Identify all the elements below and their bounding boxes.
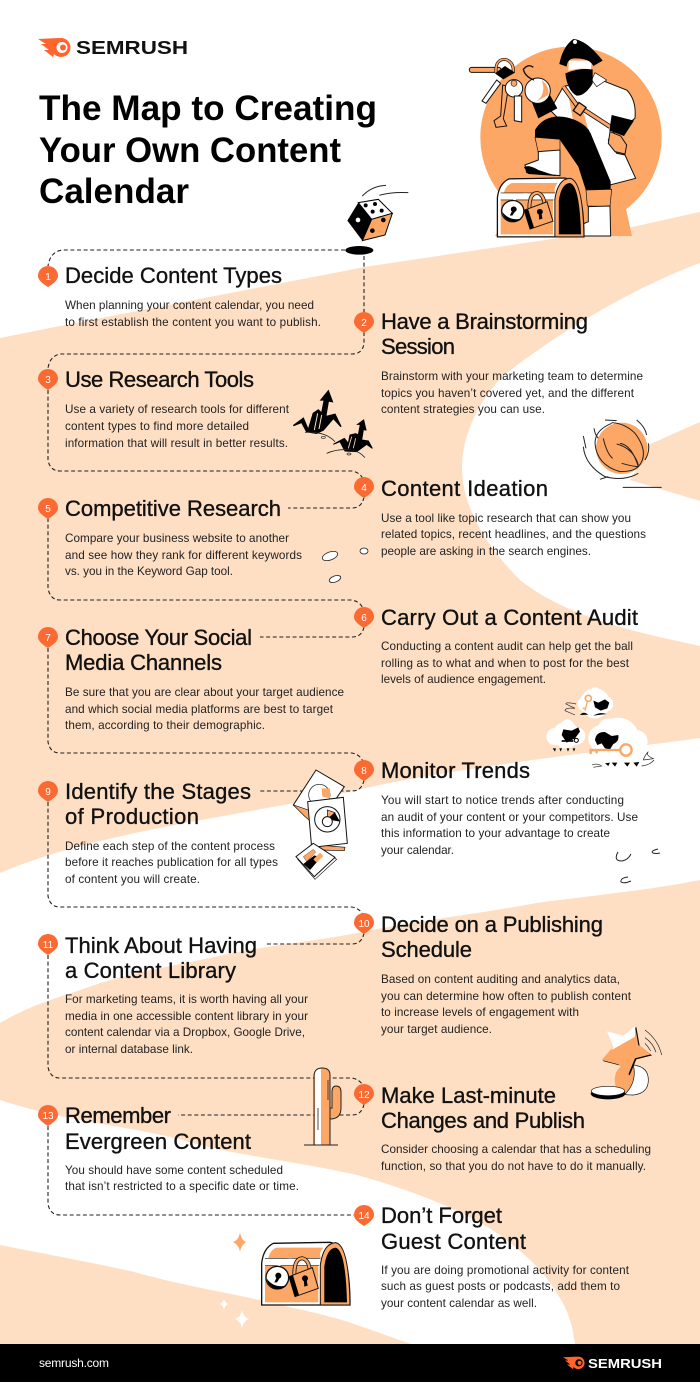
background: right peach wedge	[630, 422, 700, 501]
pin 10: 10	[358, 919, 370, 930]
step 5: vs. you in the Keyword Gap tool.	[65, 565, 233, 578]
pin 9: 9	[45, 787, 51, 798]
step 9: Identify the Stages	[65, 779, 251, 804]
step 6: rolling as to what and when to post for the best	[381, 657, 630, 670]
pin 14	[354, 1205, 374, 1226]
footer bar: semrush.com	[39, 1356, 109, 1370]
pin 3	[38, 369, 58, 390]
front document	[318, 845, 345, 851]
step 13: that isn’t restricted to a specific date or time.	[65, 1180, 299, 1193]
step 7: them, according to their demographic.	[65, 719, 265, 732]
pin 11	[38, 934, 58, 955]
step 6: Carry Out a Content Audit	[381, 605, 638, 630]
step 11: media in one accessible content library in your	[65, 1010, 308, 1023]
pin 6	[354, 607, 374, 628]
step 11: or internal database link.	[65, 1043, 193, 1056]
decoration: pebbles	[321, 548, 368, 584]
illustration: sheep with keys	[546, 687, 654, 767]
hand with keys	[532, 95, 557, 118]
step 10: Decide on a Publishing	[381, 912, 603, 937]
step 2: Brainstorm with your marketing team to determine	[381, 370, 643, 383]
title: Calendar	[39, 172, 189, 211]
illustration: star and coins	[591, 1026, 662, 1099]
shorts and lower leg	[535, 137, 560, 153]
pin 7	[38, 627, 58, 648]
keys	[469, 67, 501, 72]
pin 12	[354, 1084, 374, 1105]
pin 7: 7	[45, 633, 51, 644]
step 12	[354, 1083, 651, 1173]
pin 10	[354, 913, 374, 934]
step 4: related topics, recent headlines, and the questions	[381, 528, 646, 541]
left sheep	[546, 719, 585, 748]
step 1: to first establish the content you want to publish.	[65, 316, 321, 329]
logo: Semrush header	[38, 38, 188, 58]
step 1: When planning your content calendar, you need	[65, 299, 314, 312]
step 7: Choose Your Social	[65, 625, 252, 650]
step 13	[38, 1103, 299, 1193]
footer bar	[0, 1344, 700, 1382]
step 5: Compare your business website to another	[65, 532, 289, 545]
step 13: Remember	[65, 1103, 171, 1128]
step 7: Be sure that you are clear about your target audience	[65, 686, 344, 699]
step 6	[354, 605, 638, 686]
step 10: your target audience.	[381, 1023, 492, 1036]
step 2	[354, 309, 643, 416]
step 3: Use Research Tools	[65, 367, 254, 392]
step 3	[38, 367, 290, 450]
step 5: and see how they rank for different keywords	[65, 549, 302, 562]
step 4: Use a tool like topic research that can show you	[381, 512, 631, 525]
step 7	[38, 625, 344, 732]
step 3: information that will result in better results.	[65, 437, 288, 450]
step 4: Content Ideation	[381, 476, 548, 501]
step 8: You will start to notice trends after conducting	[381, 794, 624, 807]
step 10	[354, 912, 632, 1036]
step 9: of content you will create.	[65, 873, 200, 886]
logo: Semrush footer: SEMRUSH	[588, 1356, 662, 1371]
step 9: of Production	[65, 804, 199, 829]
logo: Semrush header: SEMRUSH	[76, 38, 188, 58]
step 9: Define each step of the content process	[65, 840, 275, 853]
title: Your Own Content	[39, 131, 341, 170]
icon: large white sparkle	[235, 1310, 249, 1329]
step 8: your calendar.	[381, 844, 454, 857]
step 11: Think About Having	[65, 933, 257, 958]
step 14	[354, 1203, 630, 1310]
step 11	[38, 933, 308, 1056]
pin 14: 14	[358, 1211, 370, 1222]
step 8	[354, 758, 638, 857]
illustration: pirate with keys on treasure chest	[469, 39, 662, 237]
background: bottom peach corner	[0, 1245, 411, 1344]
step 13: Evergreen Content	[65, 1129, 251, 1154]
step 12: Changes and Publish	[381, 1108, 585, 1133]
step 3: content types to find more detailed	[65, 420, 249, 433]
step 6: Conducting a content audit can help get the ball	[381, 640, 633, 653]
icon: small white sparkle	[220, 1299, 228, 1310]
step 14: your content calendar as well.	[381, 1297, 537, 1310]
treasure chest	[497, 178, 584, 237]
step 14: Don’t Forget	[381, 1203, 502, 1228]
step 14: such as guest posts or podcasts, add them to	[381, 1280, 620, 1293]
pin 9	[38, 781, 58, 802]
step 7: and which social media platforms are best to target	[65, 703, 334, 716]
step 10: Based on content auditing and analytics data,	[381, 973, 620, 986]
route: dashed path connecting steps	[48, 250, 364, 1215]
step 5: Competitive Research	[65, 496, 281, 521]
pin 11: 11	[43, 940, 54, 951]
armband	[609, 115, 634, 136]
illustration: bottom treasure chest	[262, 1242, 350, 1305]
step 14: Guest Content	[381, 1229, 526, 1254]
pin 2	[354, 312, 374, 333]
pin 6: 6	[361, 613, 367, 624]
step 10: Schedule	[381, 937, 472, 962]
step 8: Monitor Trends	[381, 758, 530, 783]
torso gap	[568, 95, 588, 130]
pin 8: 8	[361, 766, 367, 777]
decoration: small curls	[616, 849, 660, 883]
step 7: Media Channels	[65, 650, 222, 675]
pin 12: 12	[358, 1090, 370, 1101]
step 3: Use a variety of research tools for different	[65, 403, 290, 416]
top sheep	[578, 687, 613, 718]
background: lower peach wave	[0, 880, 700, 1344]
keyhole background	[480, 47, 662, 236]
step 14: If you are doing promotional activity for content	[381, 1264, 630, 1277]
step 2: topics you haven’t covered yet, and the different	[381, 387, 635, 400]
step 12: Consider choosing a calendar that has a scheduling	[381, 1143, 651, 1156]
step 6: levels of audience engagement.	[381, 673, 546, 686]
step 8: this information to your advantage to create	[381, 827, 610, 840]
step 10: you can determine how often to publish content	[381, 990, 632, 1003]
step 10: to increase levels of engagement with	[381, 1006, 579, 1019]
step 11: a Content Library	[65, 958, 236, 983]
illustration: documents with charts	[293, 770, 347, 879]
step 1: Decide Content Types	[65, 263, 282, 288]
pin 1: 1	[45, 272, 51, 283]
step 5	[38, 496, 302, 578]
step 9	[38, 779, 278, 886]
logo: Semrush footer	[563, 1356, 662, 1371]
front sheep	[588, 718, 648, 759]
pin 4	[354, 477, 374, 498]
title	[39, 89, 377, 211]
sash	[563, 87, 610, 127]
title: The Map to Creating	[39, 89, 377, 128]
icon: orange sparkle	[233, 1232, 246, 1252]
raised leg	[535, 117, 611, 191]
pin 1	[38, 266, 58, 287]
pin 13: 13	[42, 1111, 54, 1122]
step 8: an audit of your content or your competitors. Use	[381, 811, 638, 824]
back document	[293, 770, 344, 813]
boots	[525, 150, 560, 176]
coat	[550, 78, 636, 185]
step 2: Have a Brainstorming	[381, 309, 588, 334]
pin 5	[38, 498, 58, 519]
illustration: cactus	[304, 1068, 341, 1145]
step 12: function, so that you do not have to do it manually.	[381, 1160, 646, 1173]
step 9: before it reaches publication for all types	[65, 856, 278, 869]
illustration: origami arrows	[293, 391, 372, 458]
small card stack	[298, 846, 337, 879]
pin 5: 5	[45, 504, 51, 515]
illustration: tumbleweed	[583, 420, 662, 487]
step 1	[38, 263, 321, 329]
step 11: content calendar via a Dropbox, Google Drive,	[65, 1026, 305, 1039]
step 11: For marketing teams, it is worth having all your	[65, 993, 308, 1006]
step 12: Make Last-minute	[381, 1083, 556, 1108]
step 2: Session	[381, 334, 455, 359]
illustration: falling dice with shadow	[345, 185, 408, 255]
step 4	[354, 476, 646, 558]
pin 8	[354, 760, 374, 781]
step 4: people are asking in the search engines.	[381, 545, 591, 558]
pin 2: 2	[361, 318, 367, 329]
pin 3: 3	[45, 375, 51, 386]
hand	[608, 132, 627, 154]
step 2: content strategies you can use.	[381, 403, 545, 416]
pin 13	[38, 1105, 58, 1126]
pirate head	[592, 73, 607, 87]
step 13: You should have some content scheduled	[65, 1164, 283, 1177]
pin 4: 4	[361, 483, 367, 494]
background: upper peach wave	[0, 212, 700, 873]
